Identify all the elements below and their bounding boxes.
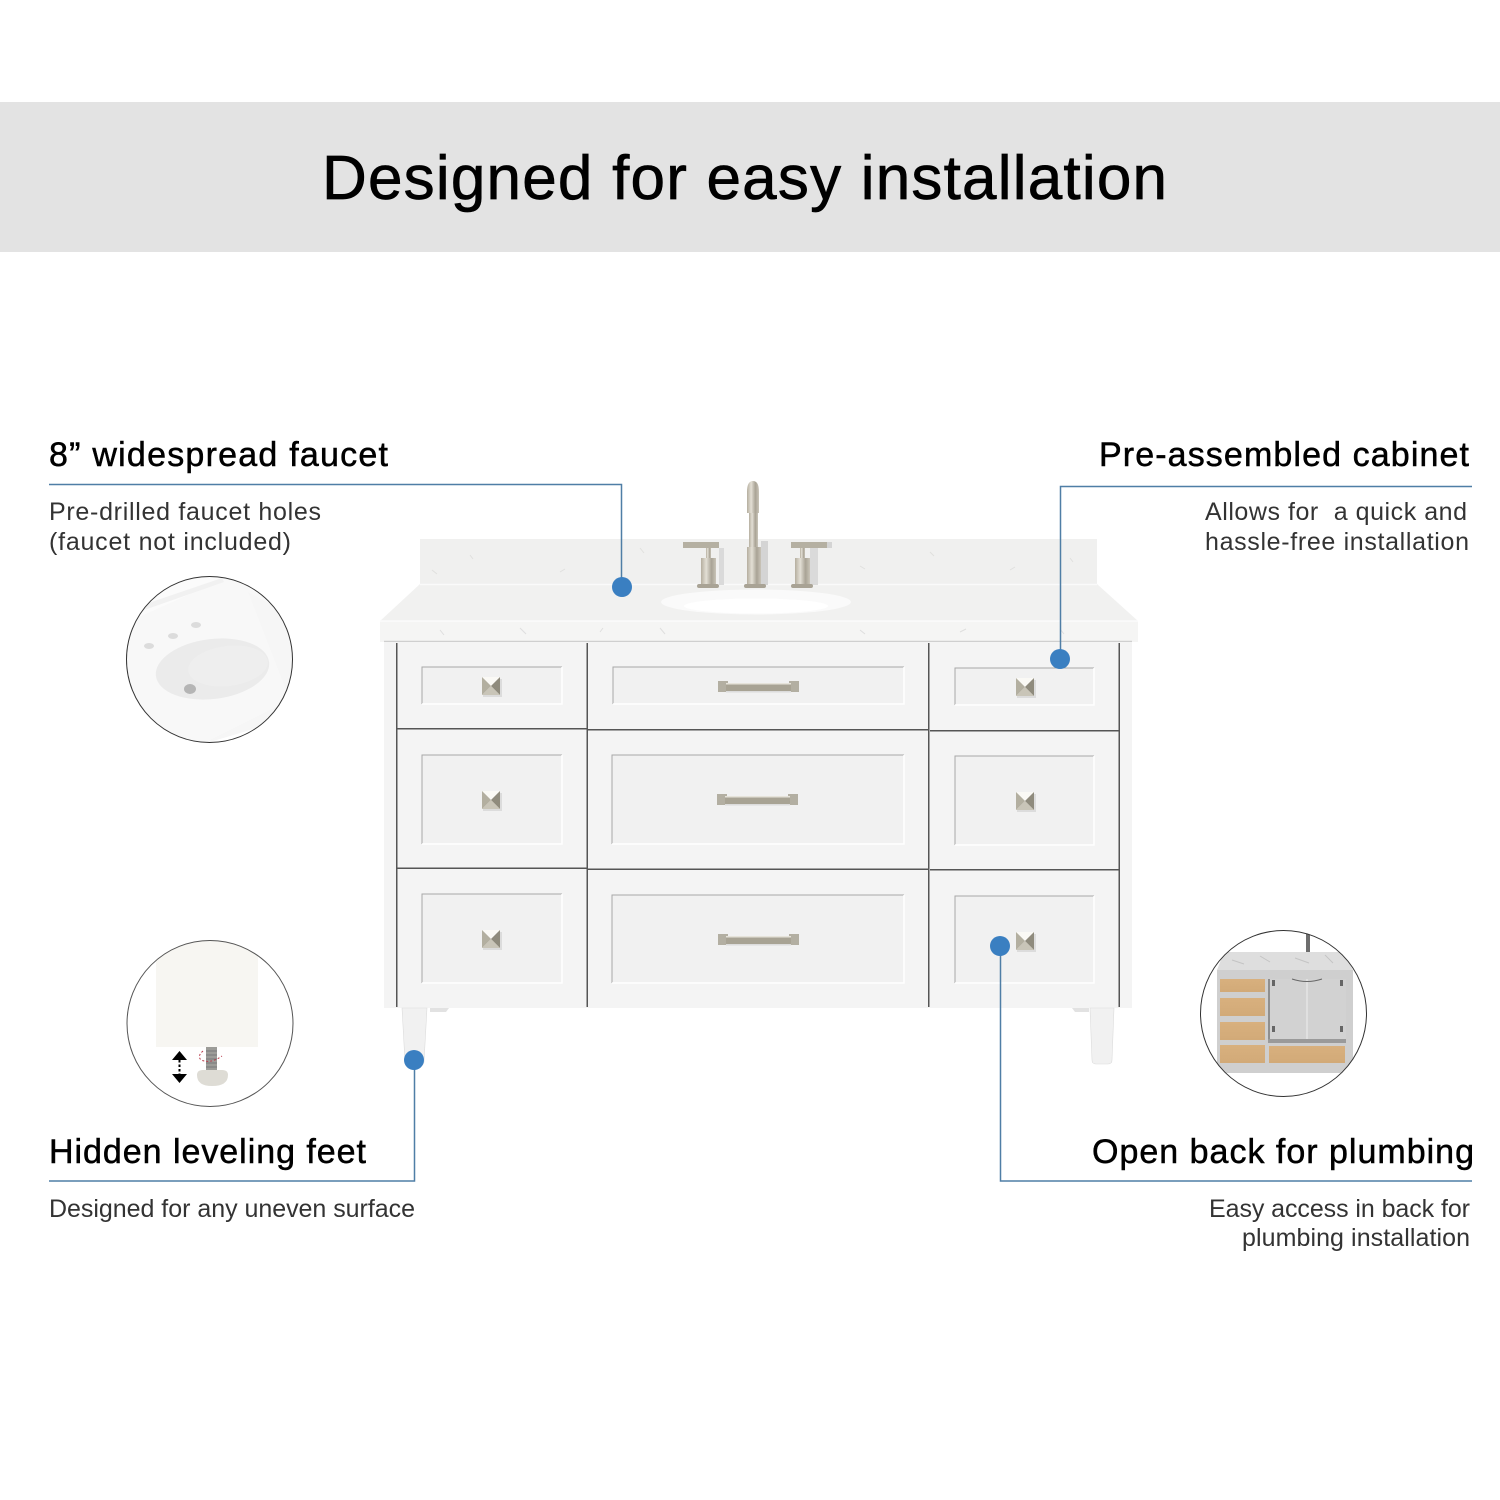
heading: 8” widespread faucet [49, 436, 389, 474]
description: (faucet not included) [49, 528, 291, 556]
inset: drilled faucet holes [126, 576, 293, 743]
description: Allows for a quick and [1205, 498, 1467, 526]
marker dot [612, 577, 632, 597]
cabinet gaps [396, 643, 1120, 1007]
leader line [49, 1060, 414, 1181]
sink [661, 590, 851, 614]
title: Designed for easy installation [322, 144, 1167, 213]
title band [0, 102, 1500, 252]
heading: Open back for plumbing [1092, 1133, 1474, 1171]
description [1209, 1195, 1470, 1252]
description: Easy access in back for [1209, 1195, 1470, 1223]
backsplash [420, 539, 1097, 585]
countertop [380, 584, 1138, 642]
leader line [49, 484, 622, 587]
description: plumbing installation [1242, 1224, 1470, 1252]
faucet [683, 481, 832, 588]
inset: open cabinet back [1200, 930, 1366, 1096]
drawer panels [422, 667, 1094, 983]
callout: hidden leveling feet [49, 1050, 424, 1223]
heading: Hidden leveling feet [49, 1133, 367, 1171]
drawer panel shadow edges [422, 667, 1094, 983]
drawer panel highlight edges [422, 667, 1094, 983]
heading: Pre-assembled cabinet [1099, 436, 1470, 474]
drawer knobs [482, 677, 1036, 952]
vanity cabinet product [380, 481, 1138, 1067]
drawer pulls [717, 681, 799, 946]
description: hassle-free installation [1205, 528, 1469, 556]
description: Pre-drilled faucet holes [49, 498, 321, 526]
marker dot [990, 936, 1010, 956]
cabinet legs [402, 1008, 1114, 1067]
cabinet body [384, 642, 1132, 1008]
description [1205, 498, 1469, 556]
marker dot [404, 1050, 424, 1070]
callout: pre-assembled cabinet [1050, 436, 1472, 669]
callout: 8 inch widespread faucet [49, 436, 632, 597]
leader line [1060, 486, 1472, 659]
description: Designed for any uneven surface [49, 1195, 415, 1223]
description [49, 498, 321, 556]
marker dot [1050, 649, 1070, 669]
leader line [1000, 946, 1472, 1181]
callout: open back for plumbing [990, 936, 1474, 1252]
inset: leveling foot [127, 930, 293, 1106]
